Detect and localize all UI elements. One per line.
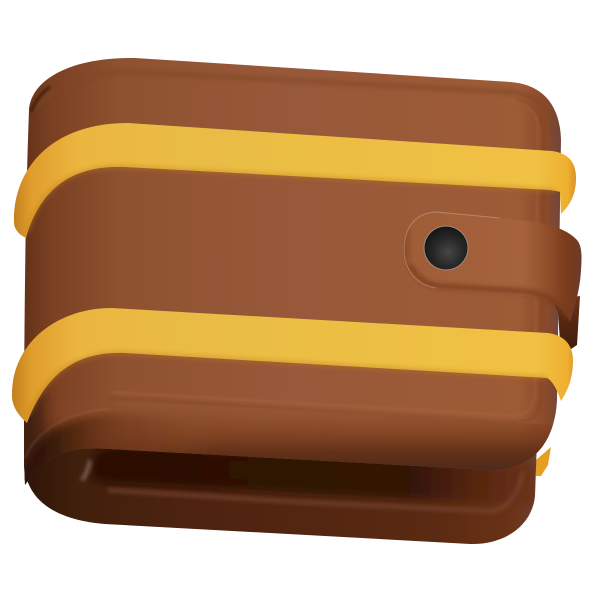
top yellow band	[14, 123, 576, 238]
strap	[403, 211, 582, 322]
lower fold shading	[24, 418, 553, 480]
opening interior	[90, 445, 535, 505]
fold highlight edge	[25, 409, 110, 458]
illustration: 3D brown wallet with yellow bands	[12, 58, 582, 544]
opening lip highlight	[108, 472, 523, 511]
fold corner highlight	[82, 460, 90, 480]
top edge shading	[120, 71, 538, 102]
stitch line right side	[110, 100, 538, 415]
strap rim highlight	[404, 212, 500, 288]
upper wallet body	[12, 58, 561, 490]
lower wallet fold and opening	[24, 448, 536, 544]
lower yellow band	[12, 308, 573, 423]
strap hook underside	[552, 296, 580, 349]
left fold darkening	[24, 413, 184, 485]
yellow band tip behind the wallet	[536, 447, 551, 476]
strap lower edge shadow	[410, 265, 568, 318]
rivet	[424, 226, 468, 270]
